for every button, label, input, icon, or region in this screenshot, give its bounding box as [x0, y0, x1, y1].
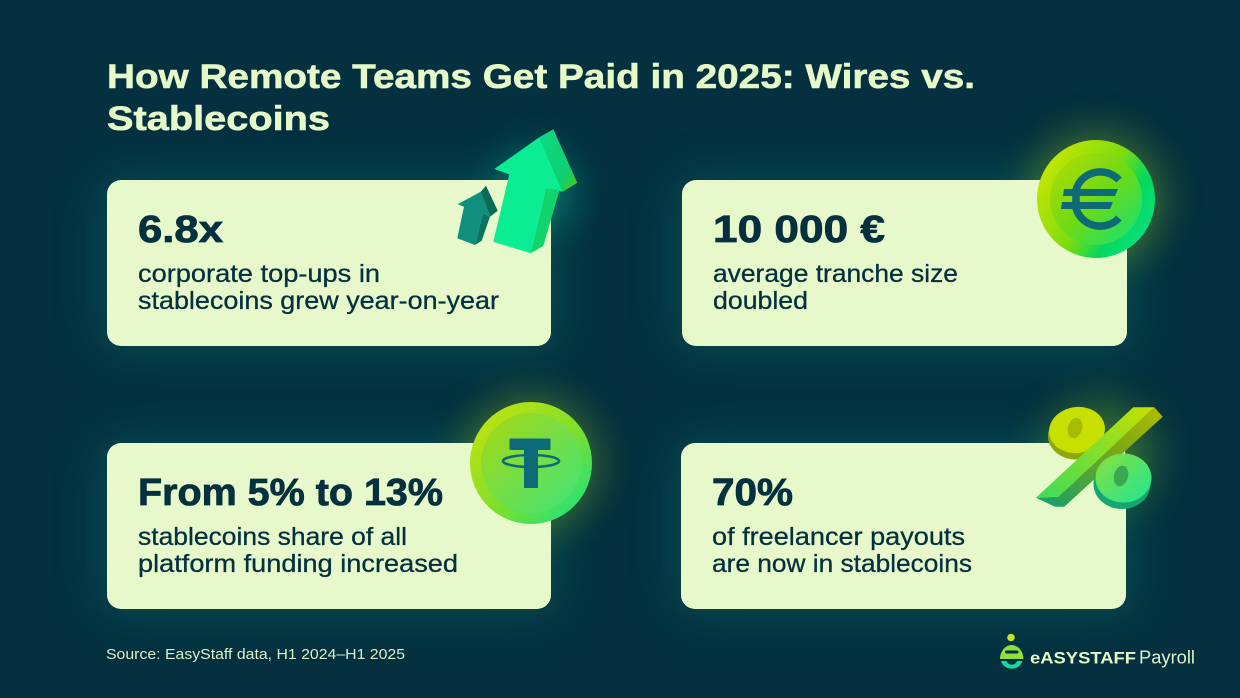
- title: How Remote Teams Get Paid in 2025: Wires vs.: [107, 58, 975, 96]
- logo: EasyStaff Payroll: eASYSTAFF: [1030, 650, 1136, 668]
- description: payouts: [712, 523, 972, 578]
- description: share: stablecoins share of all: [138, 523, 407, 551]
- description: tranche: average tranche size: [713, 260, 958, 288]
- description: share: platform funding increased: [138, 550, 458, 578]
- icon: tether coin: [470, 402, 592, 524]
- logo: EasyStaff Payroll: Payroll: [1139, 648, 1195, 668]
- logo: EasyStaff Payroll: [1000, 634, 1195, 669]
- icon: up arrows: [457, 129, 577, 253]
- description: corporate top-ups: stablecoins grew year-on-year: [138, 287, 499, 315]
- stat: 70%: 70%: [712, 472, 793, 514]
- description: corporate top-ups: corporate top-ups in: [138, 260, 380, 288]
- icon: percent sign: [1036, 403, 1163, 509]
- stat: 10 000 euro: 10 000 €: [713, 209, 885, 251]
- description: tranche: doubled: [713, 287, 808, 315]
- panel: freelancer payouts: [681, 443, 1126, 609]
- description: corporate top-ups: [138, 260, 499, 315]
- title: Stablecoins: [107, 100, 330, 138]
- panel: platform funding share: [107, 443, 551, 609]
- description: payouts: are now in stablecoins: [712, 550, 972, 578]
- panel: corporate top-ups: [107, 180, 551, 346]
- stat: 6.8x: 6.8x: [138, 209, 223, 251]
- icon: euro coin: [1037, 140, 1155, 258]
- description: payouts: of freelancer payouts: [712, 523, 965, 551]
- description: share: [138, 523, 458, 578]
- title: [107, 58, 975, 138]
- stat: from 5% to 13%: From 5% to 13%: [138, 472, 443, 514]
- description: tranche: [713, 260, 958, 315]
- logo mark: [1000, 634, 1023, 669]
- source note: Source: EasyStaff data, H1 2024–H1 2025: [106, 647, 405, 663]
- panel: tranche size: [682, 180, 1127, 346]
